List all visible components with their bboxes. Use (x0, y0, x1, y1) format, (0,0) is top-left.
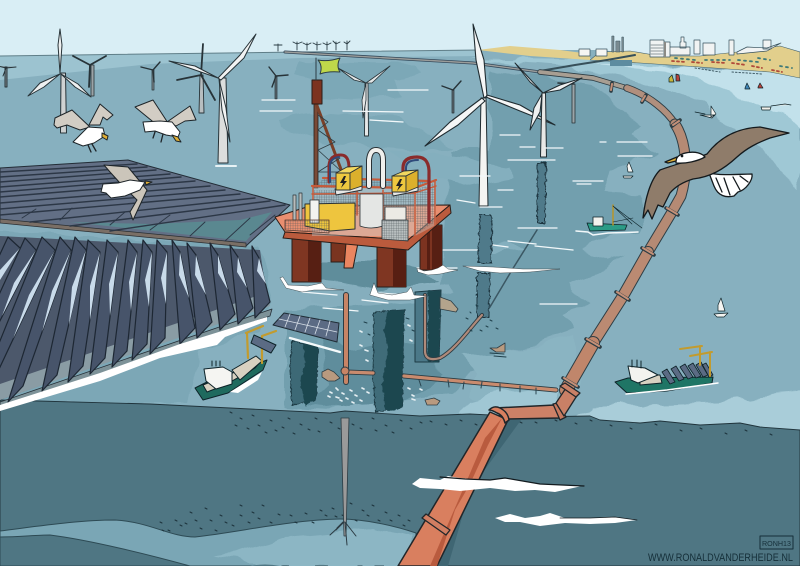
deck (275, 205, 450, 240)
flag (318, 58, 340, 74)
cable to right turbine (490, 230, 537, 307)
yellow generator (305, 203, 355, 231)
pile centre (373, 310, 404, 412)
small white wave marks (260, 90, 652, 311)
platform legs (292, 225, 442, 287)
turbine: left foreground (0, 29, 160, 133)
pipe flanges (563, 83, 680, 387)
pile centre dark side (382, 310, 404, 412)
thick export pipe (398, 383, 580, 566)
turbine: big centre (425, 24, 555, 206)
leg shading (308, 226, 442, 287)
signature box: RONH13 (762, 539, 791, 548)
white foam along solar field (0, 317, 267, 411)
mesh cage with white tank (382, 207, 408, 241)
drilled well (330, 418, 356, 545)
horizon line (0, 50, 480, 56)
coastline with city (478, 36, 800, 78)
foam around platform legs (280, 265, 560, 300)
sailboats (623, 74, 791, 317)
large gull foreground (643, 127, 789, 219)
rubble and fish (322, 297, 536, 405)
railing (285, 220, 329, 233)
gull: over solar field (101, 165, 152, 220)
turbine: right (515, 63, 582, 157)
pile right dark side (428, 290, 441, 362)
trawler (576, 205, 642, 235)
turbine: middle background (269, 66, 575, 136)
gull: left (54, 104, 113, 152)
upper frame (312, 178, 436, 236)
left pipe loop red and blue (329, 155, 349, 182)
right pipe loop red and blue (403, 157, 429, 222)
sky (0, 0, 800, 60)
white pipe loop (369, 150, 383, 186)
seabed speckles (160, 412, 772, 531)
deck edge (283, 205, 451, 250)
main pipeline curve (285, 52, 685, 390)
white tank (310, 200, 319, 223)
panel: seabed cross-section (0, 400, 800, 566)
panel: solar field front (0, 236, 272, 415)
mast with beacon (312, 58, 342, 188)
turbine: tall left pair (169, 34, 256, 166)
small boat near left (195, 326, 276, 400)
pile left (290, 341, 318, 405)
thin pipes on the seabed (341, 295, 556, 390)
transformer left (335, 166, 362, 195)
wave cut-outs across the pipe (412, 476, 637, 526)
transformer right (392, 170, 418, 196)
exhaust stacks (293, 193, 302, 220)
central machinery (360, 194, 383, 228)
far pier (540, 55, 635, 71)
signature box (760, 536, 793, 549)
gull: middle (135, 100, 196, 142)
pile left dark side (300, 343, 318, 405)
submerged tower: centre (477, 163, 546, 317)
panel: platform (275, 58, 451, 287)
submerged structures (290, 290, 441, 412)
pile right (415, 290, 441, 362)
far turbines row (274, 41, 350, 51)
panel: sea surface (0, 50, 800, 436)
panel: solar field back (0, 160, 290, 247)
floating solar array near pile (273, 313, 340, 352)
cargo ship right (615, 346, 718, 394)
